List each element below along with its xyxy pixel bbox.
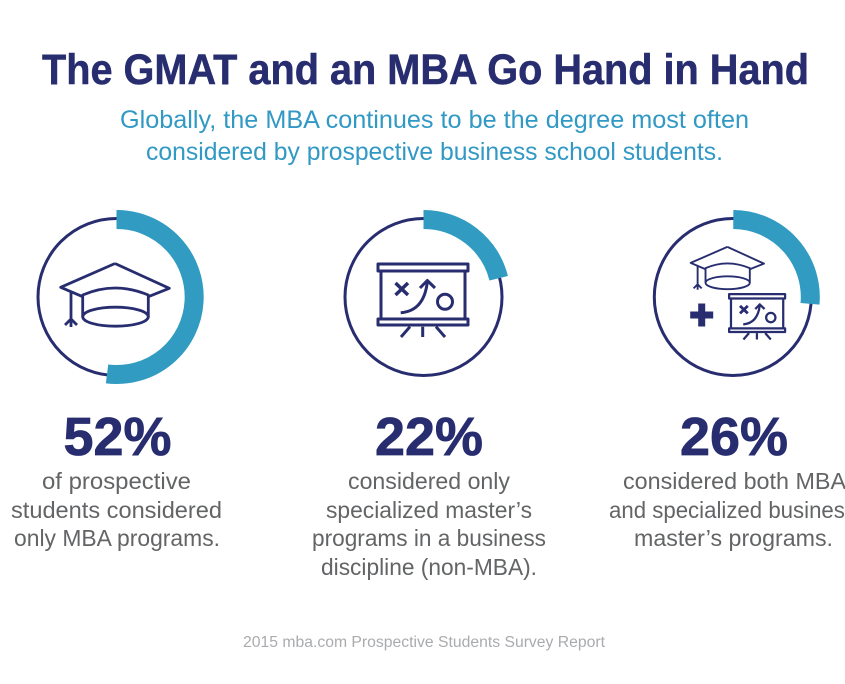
stat: 52%: 52% [64,407,172,467]
icon: graduation cap [61,264,169,327]
panel: 22% specialized only [312,218,546,580]
icon: plus sign [690,304,713,326]
subtitle: Globally, the MBA continues to be the degree most often [120,106,749,134]
description: MBA only [11,468,222,551]
stat: 22%: 22% [375,407,483,467]
stat: 26%: 26% [680,407,788,467]
description: both [609,468,845,551]
panel: 26% both [609,218,845,551]
description: both: master’s programs. [634,525,833,551]
description: specialized only [312,468,546,580]
icon: small presentation board [729,294,785,340]
icon: presentation board [378,264,468,337]
description: MBA only: only MBA programs. [14,525,220,551]
donut gauge: 22% [345,218,502,376]
subtitle: considered by prospective business school students. [146,138,723,166]
donut gauge: 26% [654,218,811,376]
description: both: considered both MBA [623,468,845,494]
donut gauge: 52% [38,218,195,376]
description: MBA only: of prospective [42,468,191,494]
description: specialized only: discipline (non-MBA). [321,554,537,580]
source note: 2015 mba.com Prospective Students Survey Report [243,634,606,651]
panel: 52% MBA only [11,218,222,551]
description: specialized only: considered only [348,468,510,494]
title: The GMAT and an MBA Go Hand in Hand [42,47,809,94]
description: MBA only: students considered [11,497,222,523]
icon: small graduation cap [691,247,764,290]
subtitle [120,106,749,166]
description: specialized only: programs in a business [312,525,546,551]
description: specialized only: specialized master’s [326,497,532,523]
